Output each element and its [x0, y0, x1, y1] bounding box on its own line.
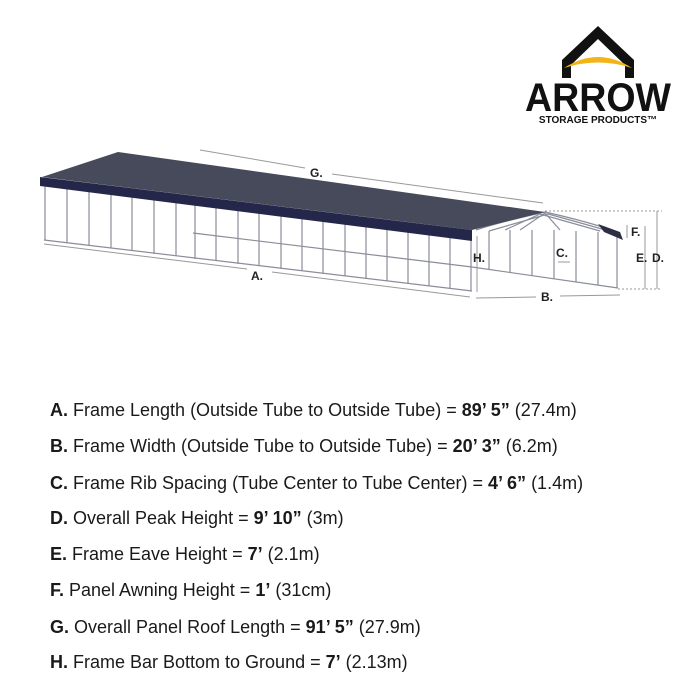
specification list: A. Frame Length (Outside Tube to Outside Tube) = 89’ 5” (27.4m) [50, 400, 577, 420]
dimension labels: E. [636, 251, 647, 265]
specification list: F. Panel Awning Height = 1’ (31cm) [50, 580, 331, 600]
front posts [44, 186, 46, 240]
logo [525, 26, 671, 126]
dimension labels: A. [251, 269, 263, 283]
carport diagram [40, 150, 664, 304]
dimension labels: B. [541, 290, 553, 304]
dimension labels: H. [473, 251, 485, 265]
dimension lines [44, 150, 662, 298]
specification list: D. Overall Peak Height = 9’ 10” (3m) [50, 508, 344, 528]
dimension labels: D. [652, 251, 664, 265]
specification list: E. Frame Eave Height = 7’ (2.1m) [50, 544, 320, 564]
specification list [50, 400, 583, 672]
dimension labels [251, 166, 664, 304]
dimension labels: F. [631, 225, 640, 239]
back side posts [488, 231, 490, 269]
dimension labels: G. [310, 166, 323, 180]
rafters [476, 212, 620, 233]
specification list: B. Frame Width (Outside Tube to Outside Tube) = 20’ 3” (6.2m) [50, 436, 558, 456]
logo: STORAGE PRODUCTS™ [539, 115, 657, 126]
logo wordmark: ARROW [525, 76, 671, 120]
specification list: C. Frame Rib Spacing (Tube Center to Tube Center) = 4’ 6” (1.4m) [50, 473, 583, 493]
roof panels [40, 152, 623, 241]
specification list: G. Overall Panel Roof Length = 91’ 5” (27.9m) [50, 617, 421, 637]
icon: house roof [562, 26, 634, 78]
specification list: H. Frame Bar Bottom to Ground = 7’ (2.13m) [50, 652, 408, 672]
dimension labels: C. [556, 246, 568, 260]
wall base lines [44, 240, 472, 291]
